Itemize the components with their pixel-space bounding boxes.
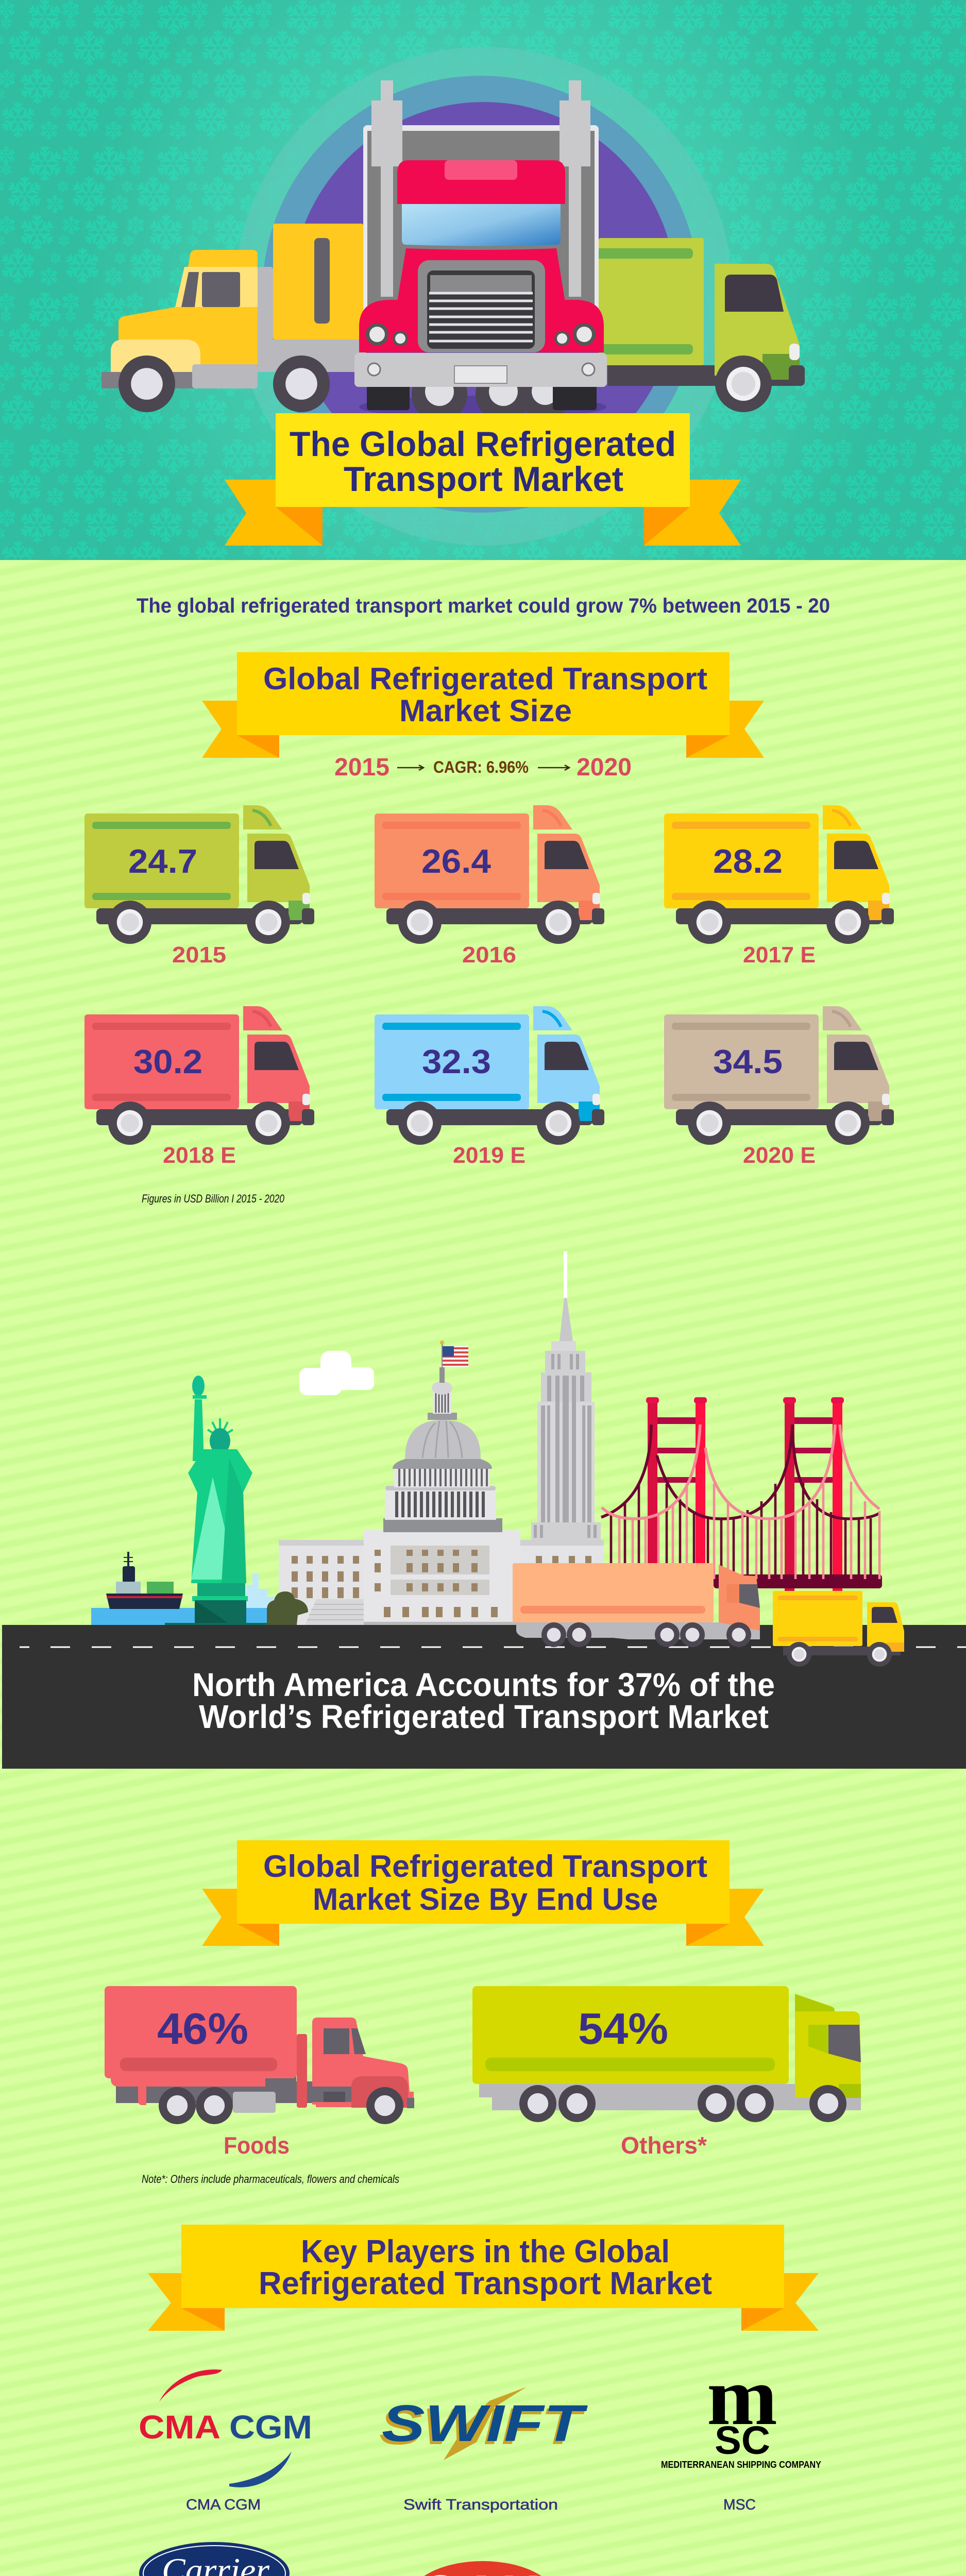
truck 2019 E: 2019 E [453,1143,526,1168]
header panel [0,0,966,560]
truck 2020 E: 2020 E [743,1143,816,1168]
road panel: World’s Refrigerated Transport Market [199,1698,769,1735]
heading: key players banner: Key Players in the Global [301,2234,670,2269]
heading: end use banner: Market Size By End Use [313,1882,658,1917]
page background: green stripes [0,560,966,2576]
CAGR row: CAGR: 6.96% [433,758,529,776]
truck 2020 E: 34.5 [713,1043,783,1080]
title banner: Transport Market [344,460,623,499]
end use note: Note*: Others include pharmaceuticals, flowers and chemicals [142,2173,399,2185]
CAGR row: 2015 [334,754,389,781]
others truck: 54% [578,2005,668,2054]
heading: market size banner [202,652,764,758]
Capitol stairs [305,1599,364,1625]
truck 2017 E: 2017 E [743,942,816,968]
icon: green truck [599,238,805,412]
Capitol wings [279,1540,604,1625]
truck 2015: 2015 [172,942,226,968]
logo: MSC: m [707,2350,777,2442]
truck 2016: 2016 [462,942,516,968]
logo: Swift: SWIFT [382,2395,588,2452]
heading: key players banner [148,2225,819,2331]
truck 2019 E: 32.3 [422,1043,491,1080]
road panel: North America Accounts for 37% of the [192,1666,775,1703]
Capitol dome [383,1341,502,1532]
others truck [472,1986,861,2159]
logo: CMA CGM: CMA CGM [186,2497,261,2513]
icon: orange truck on road [513,1563,760,1647]
logo: Swift [379,2387,588,2513]
title banner: The Global Refrigerated [290,425,676,464]
heading: end use banner: Global Refrigerated Transport [263,1849,707,1884]
logo: MSC [661,2350,821,2513]
icon: red truck front [354,80,607,422]
subtitle: The global refrigerated transport market could grow 7% between 2015 - 20 [137,595,830,617]
foods truck [105,1986,414,2159]
logo: Carrier Transicold [139,2542,290,2576]
logo: MSC: SC [715,2418,770,2463]
truck 2018 E: 30.2 [133,1043,202,1080]
icon: US flag [443,1346,468,1367]
icon: Statue of Liberty [165,1376,268,1626]
CAGR row [334,754,632,781]
truck 2017 E [664,805,894,968]
truck 2015 [84,805,314,968]
heading: key players banner: Refrigerated Transport Market [259,2266,712,2301]
icon: Empire State Building [531,1251,601,1540]
logo: CMA CGM: CGM [229,2409,312,2446]
figures note: Figures in USD Billion I 2015 - 2020 [142,1192,285,1205]
heading: market size banner: Market Size [399,693,572,728]
heading: market size banner: Global Refrigerated Transport [263,662,707,696]
truck 2019 E [375,1006,604,1168]
foods truck: Foods [224,2132,290,2159]
others truck: Others* [621,2132,707,2159]
icon: Capitol building [279,1341,604,1625]
logo: MSC: MSC [723,2497,756,2513]
truck 2018 E: 2018 E [163,1143,236,1168]
truck 2017 E: 28.2 [713,842,783,880]
truck 2016 [375,805,604,968]
icon: cloud [299,1351,374,1395]
foods truck: 46% [157,2005,248,2054]
logo: Swift: SWIFT [379,2398,586,2455]
icon: yellow truck on road [773,1591,904,1667]
road panel [2,1625,966,1769]
truck 2020 E [664,1006,894,1168]
icon: ship [106,1552,183,1609]
landmarks scene [91,1251,882,1626]
logo: Swift: Swift Transportation [403,2497,558,2513]
truck 2018 E [84,1006,314,1168]
Capitol centre block [364,1530,520,1625]
icon: water and skyline [91,1573,280,1625]
truck 2016: 26.4 [421,842,491,880]
heading: end use banner [202,1840,764,1946]
icon: Golden Gate bridge [601,1397,882,1591]
logo: MSC: MEDITERRANEAN SHIPPING COMPANY [661,2460,821,2470]
logo: CMA CGM [139,2369,312,2513]
CAGR row: 2020 [577,754,632,781]
icon: bush [267,1591,308,1625]
truck 2015: 24.7 [128,842,197,880]
icon: yellow truck [101,224,366,412]
logo: CMA CGM: CMA [139,2409,221,2446]
title banner [225,413,741,546]
